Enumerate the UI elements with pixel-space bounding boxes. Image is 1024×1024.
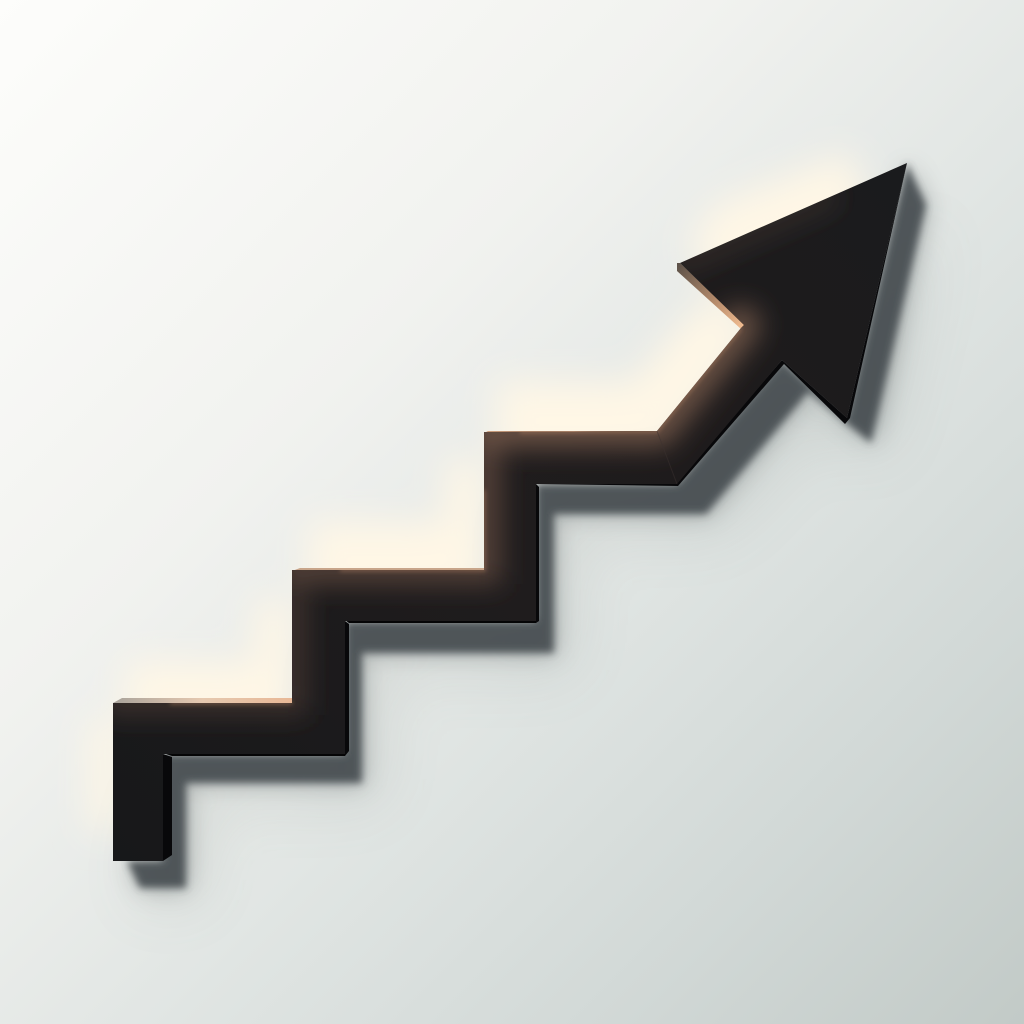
- soft ambient shadow: [135, 210, 940, 900]
- warm inner glow on face: [113, 197, 830, 703]
- bend crease: [657, 431, 677, 484]
- cast shadow: [127, 163, 926, 888]
- lower ledge lines: [163, 620, 536, 756]
- arrow main face: [113, 163, 907, 861]
- barb underside: [677, 263, 745, 329]
- top ledge of first step: [113, 698, 292, 703]
- dark right and lower depth: [163, 163, 907, 861]
- top ledge of third step: [484, 431, 657, 433]
- penumbra of cast shadow: [127, 163, 929, 890]
- warm glow behind upper edges: [90, 152, 868, 830]
- top ledge of second step: [292, 568, 484, 571]
- arrow depth faces: [113, 163, 907, 861]
